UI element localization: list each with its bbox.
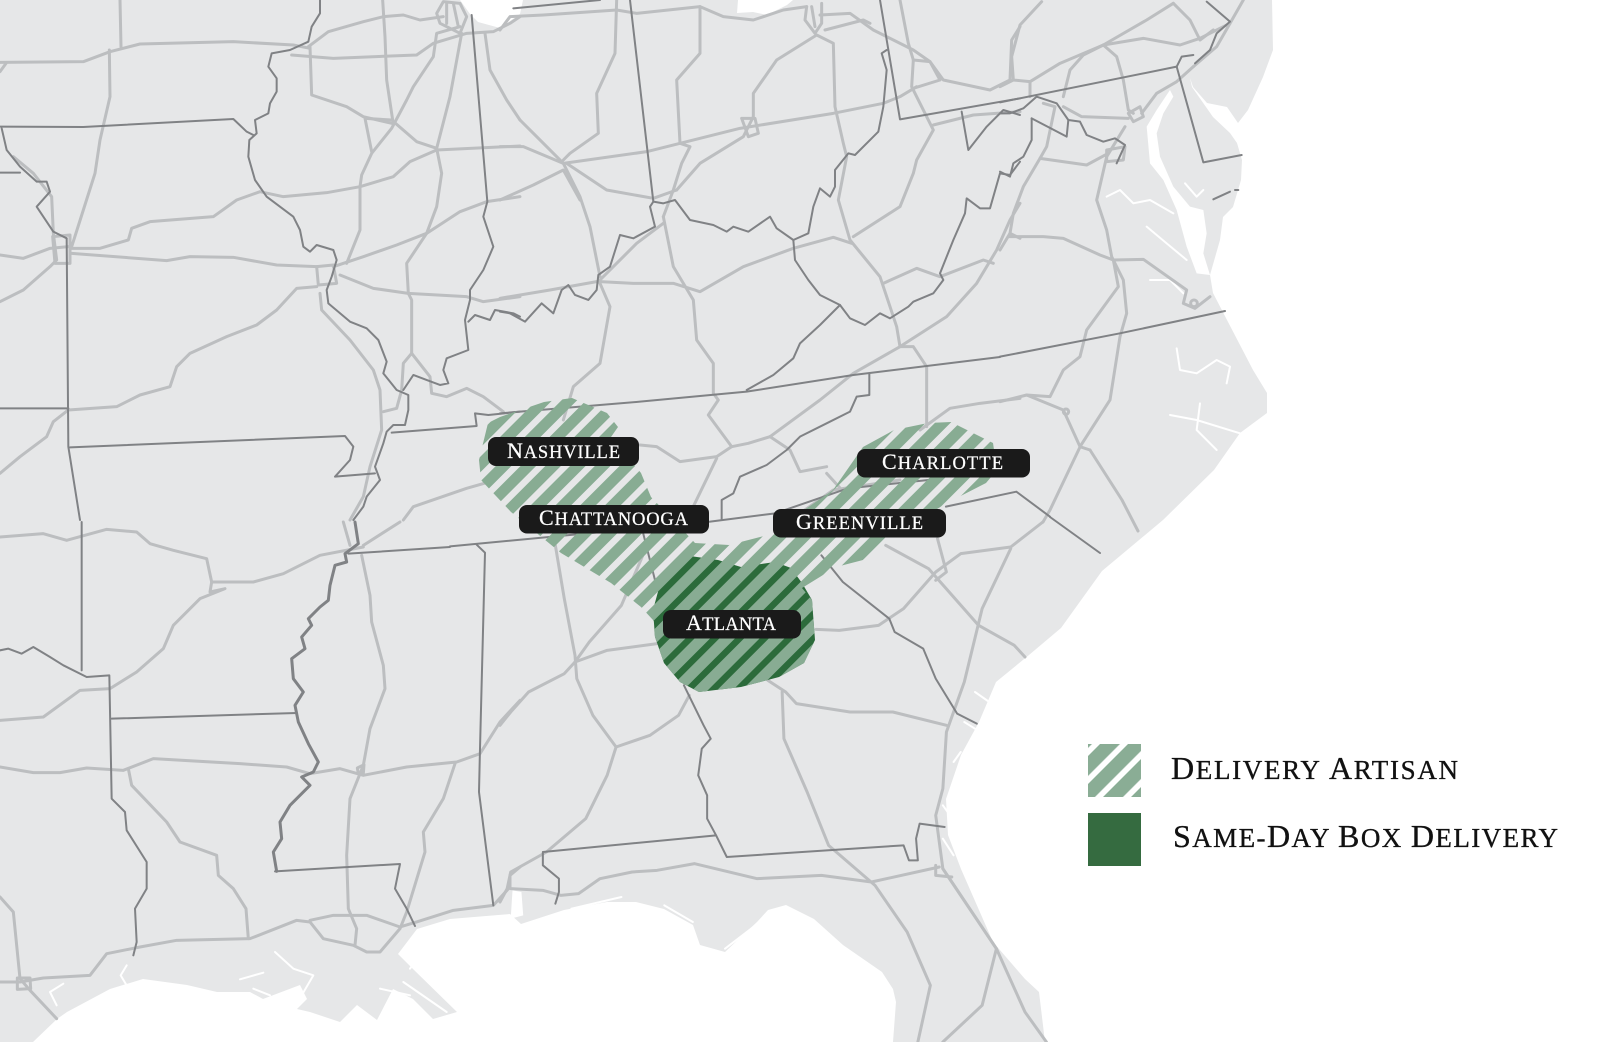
state borders (0, 0, 1242, 955)
label: Charlotte (857, 449, 1030, 478)
bays and rivers (50, 90, 1240, 1012)
legend swatch: same-day (1088, 813, 1141, 866)
delivery zones (479, 398, 997, 692)
legend (1088, 744, 1558, 866)
label: Atlanta (663, 610, 801, 638)
legend swatch: artisan (1088, 744, 1141, 797)
same-day zone: Atlanta (653, 555, 815, 692)
artisan zone: hatch region (479, 398, 997, 692)
label: Chattanooga (519, 505, 709, 534)
label: Nashville: NASHVILLE (507, 438, 620, 463)
label: Nashville (488, 437, 639, 466)
label: Chattanooga: CHATTANOOGA (539, 505, 689, 530)
legend text: artisan: DELIVERY ARTISAN (1171, 750, 1458, 786)
label: Atlanta: ATLANTA (686, 610, 777, 635)
label: Charlotte: CHARLOTTE (882, 449, 1003, 474)
label: Greenville: GREENVILLE (796, 509, 923, 534)
land mass (0, 0, 1273, 1042)
label: Greenville (773, 509, 946, 538)
highways (0, 0, 1243, 1042)
legend text: same-day: SAME-DAY BOX DELIVERY (1173, 818, 1558, 854)
